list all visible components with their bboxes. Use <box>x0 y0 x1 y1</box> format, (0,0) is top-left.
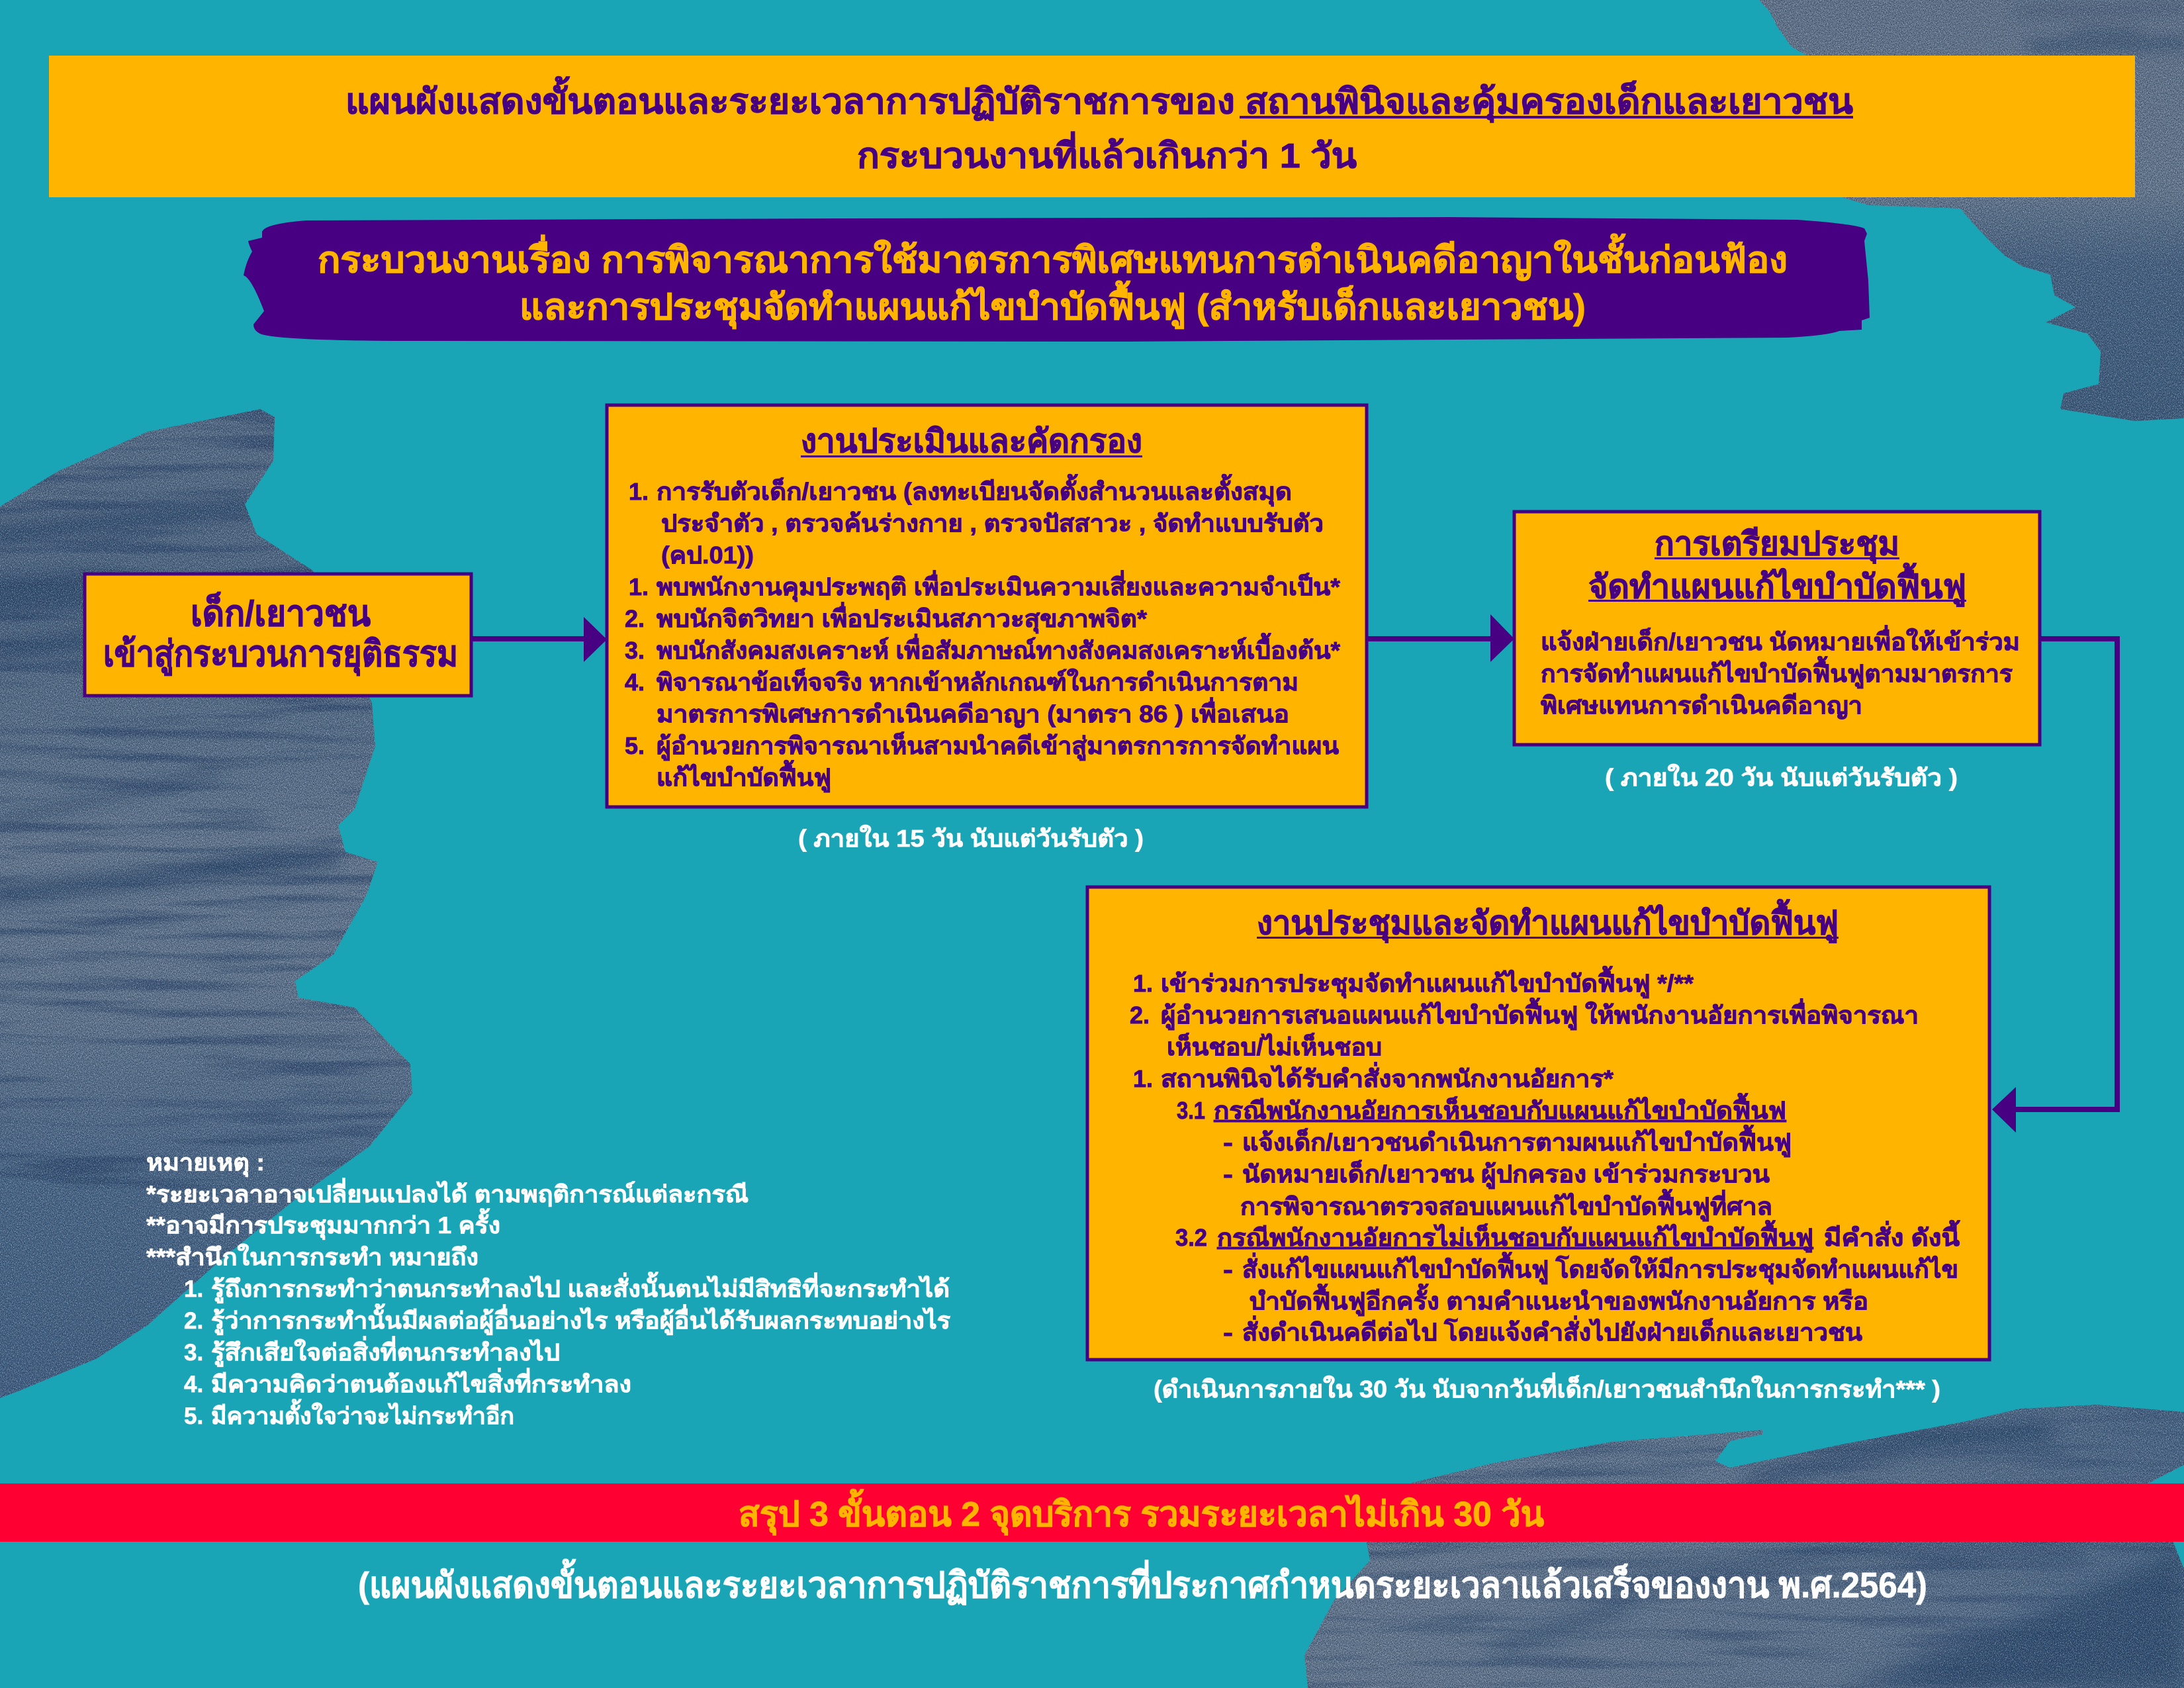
preparation heading line 1: การเตรียมประชุม <box>1655 526 1899 564</box>
notes block: 2. <box>184 1308 203 1334</box>
panel: assessment and screening <box>607 405 1367 807</box>
start box line 1: เด็ก/เยาวชน <box>191 592 371 633</box>
notes block: 4. <box>184 1372 203 1397</box>
footer source line: (แผนผังแสดงขั้นตอนและระยะเวลาการปฏิบัติราชการที่ประกาศกำหนดระยะเวลาแล้วเสร็จของงาน พ.ศ.2564) <box>358 1559 1927 1605</box>
notes block: **อาจมีการประชุมมากกว่า 1 ครั้ง <box>146 1208 500 1240</box>
assessment list: ผู้อำนวยการพิจารณาเห็นสามนำคดีเข้าสู่มาตรการการจัดทำแผน <box>657 731 1339 761</box>
meeting list: สั่งแก้ไขแผนแก้ไขบำบัดฟื้นฟู โดยจัดให้มีการประชุมจัดทำแผนแก้ไข <box>1242 1252 1958 1285</box>
notes block: *ระยะเวลาอาจเปลี่ยนแปลงได้ ตามพฤติการณ์แต่ละกรณี <box>146 1178 749 1207</box>
assessment list: พบนักสังคมสงเคราะห์ เพื่อสัมภาษณ์ทางสังคมสงเคราะห์เบื้องต้น* <box>657 633 1340 664</box>
meeting list: - <box>1223 1319 1233 1346</box>
meeting list: กรณีพนักงานอัยการไม่เห็นชอบกับแผนแก้ไขบำบัดฟื้นฟู <box>1217 1220 1813 1253</box>
meeting list: 1. <box>1133 970 1153 997</box>
start box line 2: เข้าสู่กระบวนการยุติธรรม <box>103 634 458 677</box>
assessment list: 5. <box>625 732 645 759</box>
subtitle line 1: กระบวนงานเรื่อง การพิจารณาการใช้มาตรการพิเศษแทนการดำเนินคดีอาญาในชั้นก่อนฟ้อง <box>318 234 1788 281</box>
notes block: 1. <box>184 1276 203 1302</box>
subtitle line 2: และการประชุมจัดทำแผนแก้ไขบำบัดฟื้นฟู (สำหรับเด็กและเยาวชน) <box>520 281 1586 330</box>
title underline <box>1240 116 1853 118</box>
meeting list: 3.2 <box>1175 1224 1207 1251</box>
notes block: มีความตั้งใจว่าจะไม่กระทำอีก <box>211 1399 514 1429</box>
meeting list: - <box>1223 1160 1233 1188</box>
title banner <box>49 56 2135 197</box>
panel: meeting and rehabilitation plan <box>1087 887 1989 1360</box>
meeting heading underline <box>1257 937 1839 939</box>
assessment list: แก้ไขบำบัดฟื้นฟู <box>657 760 831 793</box>
summary band <box>0 1483 2184 1542</box>
preparation heading line 2: จัดทำแผนแก้ไขบำบัดฟื้นฟู <box>1588 563 1966 607</box>
arrow: preparation to meeting <box>1992 639 2117 1133</box>
meeting list: ผู้อำนวยการเสนอแผนแก้ไขบำบัดฟื้นฟู ให้พนักงานอัยการเพื่อพิจารณา <box>1161 998 1919 1031</box>
brush stroke: bottom right <box>1304 1403 2184 1688</box>
preparation heading underline 1 <box>1655 557 1899 559</box>
preparation body: การจัดทำแผนแก้ไขบำบัดฟื้นฟูตามมาตรการ <box>1541 656 2013 689</box>
panel: start box <box>85 574 471 696</box>
meeting list: 1. <box>1133 1065 1153 1092</box>
meeting list: บำบัดฟื้นฟูอีกครั้ง ตามคำแนะนำของพนักงานอัยการ หรือ <box>1250 1284 1868 1317</box>
brush stroke: top right <box>1759 0 2184 421</box>
meeting list: การพิจารณาตรวจสอบแผนแก้ไขบำบัดฟื้นฟูที่ศาล <box>1240 1189 1772 1222</box>
caption: 15 days: ( ภายใน 15 วัน นับแต่วันรับตัว ) <box>798 824 1144 852</box>
assessment list: มาตรการพิเศษการดำเนินคดีอาญา (มาตรา 86 ) เพื่อเสนอ <box>657 697 1289 728</box>
meeting list: เห็นชอบ/ไม่เห็นชอบ <box>1167 1032 1382 1060</box>
meeting list: - <box>1223 1129 1233 1156</box>
assessment list: 1. <box>629 478 649 505</box>
meeting list: สถานพินิจได้รับคำสั่งจากพนักงานอัยการ* <box>1161 1062 1614 1092</box>
assessment heading: งานประเมินและคัดกรอง <box>801 424 1142 459</box>
meeting list: นัดหมายเด็ก/เยาวชน ผู้ปกครอง เข้าร่วมกระบวน <box>1242 1159 1770 1190</box>
title line 2: กระบวนงานที่แล้วเกินกว่า 1 วัน <box>857 132 1357 175</box>
assessment list: 1. <box>629 573 649 600</box>
notes block: 5. <box>184 1403 203 1429</box>
assessment list: 4. <box>625 669 645 696</box>
assessment heading underline <box>801 455 1142 457</box>
preparation body: แจ้งฝ่ายเด็ก/เยาวชน นัดหมายเพื่อให้เข้าร่วม <box>1541 625 2020 655</box>
meeting list: 2. <box>1130 1002 1150 1029</box>
assessment list: ประจำตัว , ตรวจค้นร่างกาย , ตรวจปัสสาวะ , จัดทำแบบรับตัว <box>661 510 1324 537</box>
preparation body: พิเศษแทนการดำเนินคดีอาญา <box>1541 692 1862 720</box>
assessment list: การรับตัวเด็ก/เยาวชน (ลงทะเบียนจัดตั้งสำนวนและตั้งสมุด <box>657 474 1292 507</box>
notes block: ***สำนึกในการกระทำ หมายถึง <box>146 1243 478 1270</box>
meeting list: แจ้งเด็ก/เยาวชนดำเนินการตามผนแก้ไขบำบัดฟื้นฟู <box>1242 1125 1792 1158</box>
meeting list: เข้าร่วมการประชุมจัดทำแผนแก้ไขบำบัดฟื้นฟู */** <box>1161 966 1694 999</box>
meeting list <box>1130 966 1960 1346</box>
notes block: รู้ถึงการกระทำว่าตนกระทำลงไป และสั่งนั้นตนไม่มีสิทธิที่จะกระทำได้ <box>211 1272 950 1303</box>
arrow: assessment to preparation <box>1368 614 1514 662</box>
preparation heading underline 2 <box>1588 600 1966 602</box>
assessment list: 3. <box>625 637 645 664</box>
preparation body <box>1541 625 2020 720</box>
meeting list: 3.1 <box>1177 1097 1205 1124</box>
notes block: มีความคิดว่าตนต้องแก้ไขสิ่งที่กระทำลง <box>211 1368 631 1397</box>
meeting list: มีคำสั่ง ดังนี้ <box>1824 1220 1960 1251</box>
caption: 30 days: (ดำเนินการภายใน 30 วัน นับจากวันที่เด็ก/เยาวชนสำนึกในการกระทำ*** ) <box>1154 1372 1940 1403</box>
notes block <box>146 1150 950 1429</box>
notes block: 3. <box>184 1340 203 1366</box>
meeting heading: งานประชุมและจัดทำแผนแก้ไขบำบัดฟื้นฟู <box>1257 899 1839 943</box>
meeting list: - <box>1223 1256 1233 1283</box>
panel: meeting preparation <box>1514 512 2040 745</box>
meeting list: สั่งดำเนินคดีต่อไป โดยแจ้งคำสั่งไปยังฝ่ายเด็กและเยาวชน <box>1242 1315 1862 1346</box>
assessment list: พบนักจิตวิทยา เพื่อประเมินสภาวะสุขภาพจิต* <box>657 602 1147 634</box>
subtitle brush panel <box>244 217 1870 342</box>
brush stroke: left <box>0 397 424 1398</box>
meeting list: กรณีพนักงานอัยการเห็นชอบกับแผนแก้ไขบำบัดฟื้นฟ <box>1214 1093 1786 1124</box>
assessment list: พิจารณาข้อเท็จจริง หากเข้าหลักเกณฑ์ในการดำเนินการตาม <box>657 667 1298 696</box>
arrow: start to assessment <box>473 617 607 662</box>
caption: 20 days: ( ภายใน 20 วัน นับแต่วันรับตัว ) <box>1605 763 1958 791</box>
assessment list: (คป.01)) <box>661 541 754 569</box>
summary text: สรุป 3 ขั้นตอน 2 จุดบริการ รวมระยะเวลาไม่เกิน 30 วัน <box>739 1489 1544 1536</box>
notes block: รู้สึกเสียใจต่อสิ่งที่ตนกระทำลงไป <box>211 1336 560 1367</box>
title line 1: แผนผังแสดงขั้นตอนและระยะเวลาการปฏิบัติราชการของ สถานพินิจและคุ้มครองเด็กและเยาวชน <box>345 76 1853 123</box>
assessment list <box>625 474 1340 793</box>
assessment list: 2. <box>625 605 645 632</box>
notes block: หมายเหตุ : <box>146 1150 265 1177</box>
assessment list: พบพนักงานคุมประพฤติ เพื่อประเมินความเสี่ยงและความจำเป็น* <box>657 570 1340 602</box>
notes block: รู้ว่าการกระทำนั้นมีผลต่อผู้อื่นอย่างไร หรือผู้อื่นได้รับผลกระทบอย่างไร <box>211 1303 950 1335</box>
